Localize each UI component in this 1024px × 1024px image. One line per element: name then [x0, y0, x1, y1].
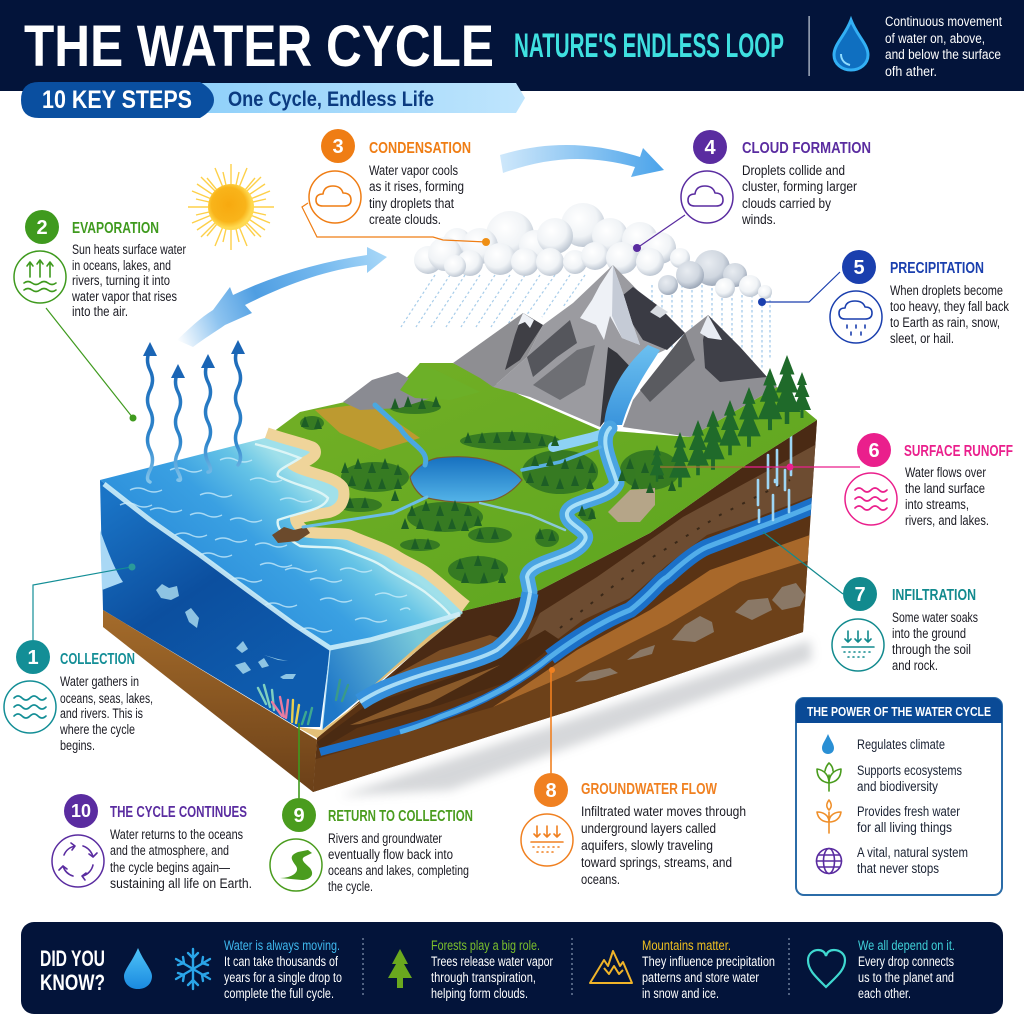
step 9: return to collection: eventually flow back into	[328, 847, 453, 862]
icon: plant	[817, 800, 841, 833]
arrow 2	[171, 364, 185, 480]
mountain range	[453, 265, 777, 437]
ocean cross-section	[100, 480, 330, 727]
step 6: surface runoff: rivers, and lakes.	[905, 513, 989, 528]
step 4: cloud formation	[681, 130, 871, 227]
falling underground river	[360, 593, 530, 702]
arrow: vapor moving to cloud formation	[500, 145, 664, 177]
step 1: collection	[4, 640, 153, 753]
fact 2: through transpiration,	[431, 970, 536, 985]
panel: did you know	[21, 922, 1003, 1014]
step 3: condensation: CONDENSATION	[369, 140, 471, 157]
step 8: groundwater flow: underground layers called	[581, 821, 716, 836]
icon: sprout	[817, 763, 841, 791]
icon: winding river	[270, 839, 322, 891]
icon: tree	[388, 949, 412, 988]
icon: waves	[845, 473, 897, 525]
front foam edge	[104, 484, 460, 648]
step 6: surface runoff: Water flows over	[905, 465, 986, 480]
fact 2: Trees release water vapor	[431, 954, 553, 969]
fact 3: They influence precipitation	[642, 954, 775, 969]
step 7: infiltration: into the ground	[892, 626, 966, 641]
fact 3: in snow and ice.	[642, 986, 719, 1001]
step 4: cloud formation: CLOUD FORMATION	[742, 140, 871, 157]
fact 1: years for a single drop to	[224, 970, 342, 985]
earth cross-section	[300, 410, 830, 800]
step 5: precipitation: 5	[853, 257, 865, 279]
fact 1	[224, 938, 342, 1001]
step 4: cloud formation: cluster, forming larger	[742, 179, 857, 194]
step 10: the cycle continues	[52, 794, 252, 891]
step 8: groundwater flow: 8	[545, 780, 557, 802]
step 9: return to collection: the cycle.	[328, 879, 373, 894]
illustration: landscape block	[100, 265, 830, 800]
waterfall	[604, 345, 660, 425]
fact 4: We all depend on it.	[858, 938, 955, 953]
underwater life	[156, 584, 296, 679]
step 10: the cycle continues: sustaining all life on Earth.	[110, 876, 252, 891]
step 7: infiltration: Some water soaks	[892, 610, 978, 625]
header description	[885, 14, 1002, 79]
banner: 10 key steps	[21, 82, 525, 118]
icon: cycle arrows	[52, 835, 104, 887]
icon: drop	[822, 734, 834, 754]
step 5: precipitation: sleet, or hail.	[890, 331, 954, 346]
green hill	[400, 363, 480, 400]
rocks	[575, 583, 805, 682]
icon: cloud	[309, 171, 361, 223]
step 6: surface runoff: 6	[868, 440, 880, 462]
step 6: surface runoff: into streams,	[905, 497, 969, 512]
right mountain	[623, 315, 777, 437]
step 7: infiltration: INFILTRATION	[892, 587, 976, 604]
step 3: condensation: create clouds.	[369, 212, 441, 227]
subtitle: NATURE'S ENDLESS LOOP	[514, 27, 784, 65]
fact 1: Water is always moving.	[224, 938, 340, 953]
step 1: collection: COLLECTION	[60, 651, 135, 668]
step 7: infiltration	[832, 577, 978, 673]
step 9: return to collection: 9	[293, 805, 305, 827]
panel: the power of the water cycle: and biodiversity	[857, 779, 938, 794]
step 8: groundwater flow: GROUNDWATER FLOW	[581, 781, 718, 798]
fact 2: helping form clouds.	[431, 986, 528, 1001]
panel: the power of the water cycle: A vital, natural system	[857, 845, 968, 860]
main peak	[493, 265, 685, 427]
icon: soaking arrows	[832, 619, 884, 671]
step 1: collection: and rivers. This is	[60, 706, 143, 721]
step 10: the cycle continues: and the atmosphere, and	[110, 843, 229, 858]
forest patches	[300, 400, 680, 584]
icon: mountain	[590, 951, 632, 983]
main land surface	[265, 363, 817, 611]
small distant mountain	[343, 372, 444, 410]
icon: globe	[816, 848, 842, 874]
fact 1: complete the full cycle.	[224, 986, 334, 1001]
banner: 10 key steps: One Cycle, Endless Life	[228, 88, 434, 111]
panel: the power of the water cycle: that never stops	[857, 861, 939, 876]
sandy shoreline	[265, 438, 463, 610]
icon: snowflake	[176, 949, 210, 989]
step 1: collection: oceans, seas, lakes,	[60, 691, 153, 706]
icon: waves	[4, 681, 56, 733]
arrow 1	[143, 342, 157, 482]
step 8: groundwater flow: aquifers, slowly traveling	[581, 838, 713, 853]
step 7: infiltration: and rock.	[892, 658, 938, 673]
ocean surface	[100, 438, 463, 650]
step 2: evaporation: 2	[36, 217, 48, 239]
coral	[258, 680, 348, 724]
step 4: cloud formation: clouds carried by	[742, 196, 831, 211]
step 5: precipitation	[830, 250, 1009, 346]
icon: drop	[124, 948, 152, 989]
step 5: precipitation: PRECIPITATION	[890, 260, 984, 277]
fact 2	[431, 938, 553, 1001]
icon: rising vapor	[14, 251, 66, 303]
panel: the power of the water cycle: for all living things	[857, 820, 952, 835]
step 1: collection: Water gathers in	[60, 674, 139, 689]
step 2: evaporation	[14, 210, 186, 319]
step 8: groundwater flow: Infiltrated water moves through	[581, 804, 746, 819]
step 2: evaporation: Sun heats surface water	[72, 242, 186, 257]
step 6: surface runoff: the land surface	[905, 481, 985, 496]
title: THE WATER CYCLE	[24, 14, 494, 79]
step 3: condensation	[309, 129, 471, 227]
rocky patch	[608, 488, 655, 522]
rivers	[303, 405, 617, 592]
header description: Continuous movement	[885, 14, 1002, 29]
left mountain	[453, 313, 543, 387]
step 8: groundwater flow	[521, 773, 746, 887]
step 4: cloud formation: Droplets collide and	[742, 163, 845, 178]
fact 3: patterns and store water	[642, 970, 759, 985]
wavy evaporation arrows	[143, 340, 245, 482]
step 2: evaporation: EVAPORATION	[72, 220, 159, 237]
step 10: the cycle continues: Water returns to the oceans	[110, 827, 243, 842]
shore foam	[255, 444, 450, 615]
banner: 10 key steps: 10 KEY STEPS	[42, 86, 192, 114]
header band	[0, 0, 1024, 91]
rain: left	[401, 275, 585, 327]
icon: cloud	[681, 171, 733, 223]
aquifer	[320, 657, 550, 752]
heading: DID YOU	[40, 946, 105, 971]
fact 3	[642, 938, 775, 1001]
step 3: condensation: tiny droplets that	[369, 196, 454, 211]
step 1: collection: begins.	[60, 738, 95, 753]
ocean front face	[322, 613, 463, 730]
sediment layer	[103, 610, 317, 792]
leader lines	[33, 203, 860, 798]
step 2: evaporation: water vapor that rises	[71, 289, 177, 304]
icon: heart	[808, 950, 845, 987]
panel: the power of the water cycle: Provides fresh water	[857, 804, 960, 819]
step 4: cloud formation: winds.	[741, 212, 776, 227]
clouds	[414, 203, 772, 299]
rain: right	[652, 285, 770, 375]
heading: KNOW?	[40, 970, 105, 995]
surface ripples	[120, 458, 410, 632]
step 10: the cycle continues: 10	[71, 801, 91, 821]
fact 4: us to the planet and	[858, 970, 954, 985]
lower right cloud puffs	[658, 250, 747, 295]
fact 3: Mountains matter.	[642, 938, 731, 953]
step 4: cloud formation: 4	[704, 137, 716, 159]
small trees	[301, 396, 676, 583]
step 7: infiltration: through the soil	[892, 642, 971, 657]
step 1: collection: where the cycle	[59, 722, 135, 737]
fact 4: Every drop connects	[858, 954, 954, 969]
icon: rain cloud	[830, 291, 882, 343]
step 2: evaporation: in oceans, lakes, and	[72, 258, 171, 273]
step 3: condensation: 3	[332, 136, 344, 158]
icon: sun	[188, 164, 274, 250]
pale water wedge	[100, 530, 123, 590]
step 9: return to collection: Rivers and groundwater	[328, 831, 442, 846]
step 2: evaporation: rivers, turning it into	[72, 273, 170, 288]
header description: ofh ather.	[885, 64, 937, 79]
step 9: return to collection: RETURN TO COLLECTION	[328, 808, 473, 825]
icon: water drop	[834, 20, 868, 70]
arrow: evaporation rising to clouds	[177, 247, 387, 347]
step 1: collection: 1	[27, 647, 39, 669]
step 5: precipitation: to Earth as rain, snow,	[890, 315, 1000, 330]
step 8: groundwater flow: oceans.	[581, 872, 620, 887]
infiltration drips	[758, 435, 791, 522]
panel: the power of the water cycle	[796, 698, 1002, 895]
tall pines	[650, 355, 811, 487]
arrow 3	[201, 354, 215, 472]
main cloud puffs	[414, 203, 690, 277]
fact 4	[858, 938, 955, 1001]
arrow 4	[231, 340, 245, 465]
fact 1: It can take thousands of	[224, 954, 338, 969]
heading	[40, 946, 105, 995]
step 10: the cycle continues: THE CYCLE CONTINUES	[110, 804, 247, 821]
farm fields	[315, 403, 420, 450]
fact 2: Forests play a big role.	[431, 938, 540, 953]
step 10: the cycle continues: the cycle begins again—	[110, 860, 230, 875]
step 9: return to collection	[270, 798, 473, 894]
header description: of water on, above,	[885, 31, 985, 46]
panel: the power of the water cycle: Regulates climate	[857, 737, 945, 752]
step 3: condensation: Water vapor cools	[369, 163, 458, 178]
header description: and below the surface	[885, 47, 1001, 62]
step 7: infiltration: 7	[854, 584, 866, 606]
lake	[410, 457, 522, 502]
step 6: surface runoff	[845, 433, 1013, 528]
step 3: condensation: as it rises, forming	[369, 179, 464, 194]
panel: the power of the water cycle: Supports ecosystems	[857, 763, 962, 778]
step 9: return to collection: oceans and lakes, completing	[328, 863, 469, 878]
icon: soaking arrows	[521, 814, 573, 866]
fact 4: each other.	[858, 986, 911, 1001]
step 2: evaporation: into the air.	[72, 304, 128, 319]
small rock outcrop on shore	[272, 527, 310, 543]
step 8: groundwater flow: toward springs, streams, and	[581, 855, 732, 870]
